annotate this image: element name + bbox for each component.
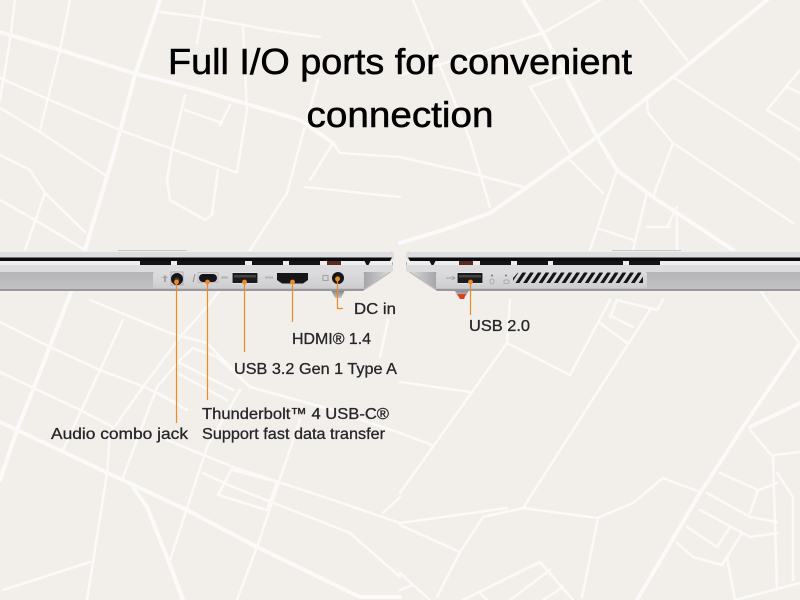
leader: USB 2.0 — [469, 280, 472, 315]
USB symbol — [446, 276, 455, 280]
label: DC in: DC in — [354, 301, 396, 318]
label: Thunderbolt 4 USB-C — [202, 406, 389, 443]
port: USB 2.0 — [457, 272, 483, 284]
port: HDMI 1.4 — [265, 273, 308, 284]
port: Thunderbolt 4 USB-C — [193, 272, 228, 282]
port: USB 3.2 Gen 1 Type A — [232, 272, 258, 284]
label: Audio combo jack: Audio combo jack — [51, 426, 189, 443]
laptop left side view — [0, 250, 394, 298]
laptop right side view — [406, 250, 800, 299]
callout leader lines — [175, 277, 472, 423]
laptop lid left — [0, 251, 394, 260]
laptop base right — [406, 262, 800, 290]
port: audio combo jack — [162, 272, 183, 285]
laptop base left — [0, 262, 393, 290]
leader: USB 3.2 — [243, 280, 246, 352]
label: USB 3.2 Gen 1 Type A: USB 3.2 Gen 1 Type A — [234, 361, 397, 378]
label: Thunderbolt 4 USB-C: Thunderbolt™ 4 USB-C® — [202, 406, 389, 423]
port panel left — [153, 272, 364, 288]
port: DC in — [323, 272, 344, 284]
title: connection — [306, 94, 494, 135]
label: USB 2.0: USB 2.0 — [469, 318, 530, 335]
label: Thunderbolt 4 USB-C: Support fast data transfer — [202, 426, 386, 443]
hinge slits right — [429, 260, 660, 265]
laptop lid right — [406, 251, 800, 260]
label: HDMI 1.4: HDMI® 1.4 — [292, 331, 371, 348]
hinge slits left — [140, 260, 371, 265]
leader: audio combo jack — [175, 280, 178, 423]
leader: HDMI — [291, 280, 294, 322]
title — [168, 41, 632, 135]
title: Full I/O ports for convenient — [168, 41, 632, 82]
laptop foot right — [453, 288, 470, 299]
port panel right — [436, 272, 647, 288]
leader: Thunderbolt — [206, 280, 209, 400]
air vents — [513, 272, 643, 283]
leader: DC in — [336, 277, 343, 308]
laptop foot left — [330, 288, 346, 298]
status indicators — [490, 274, 509, 284]
